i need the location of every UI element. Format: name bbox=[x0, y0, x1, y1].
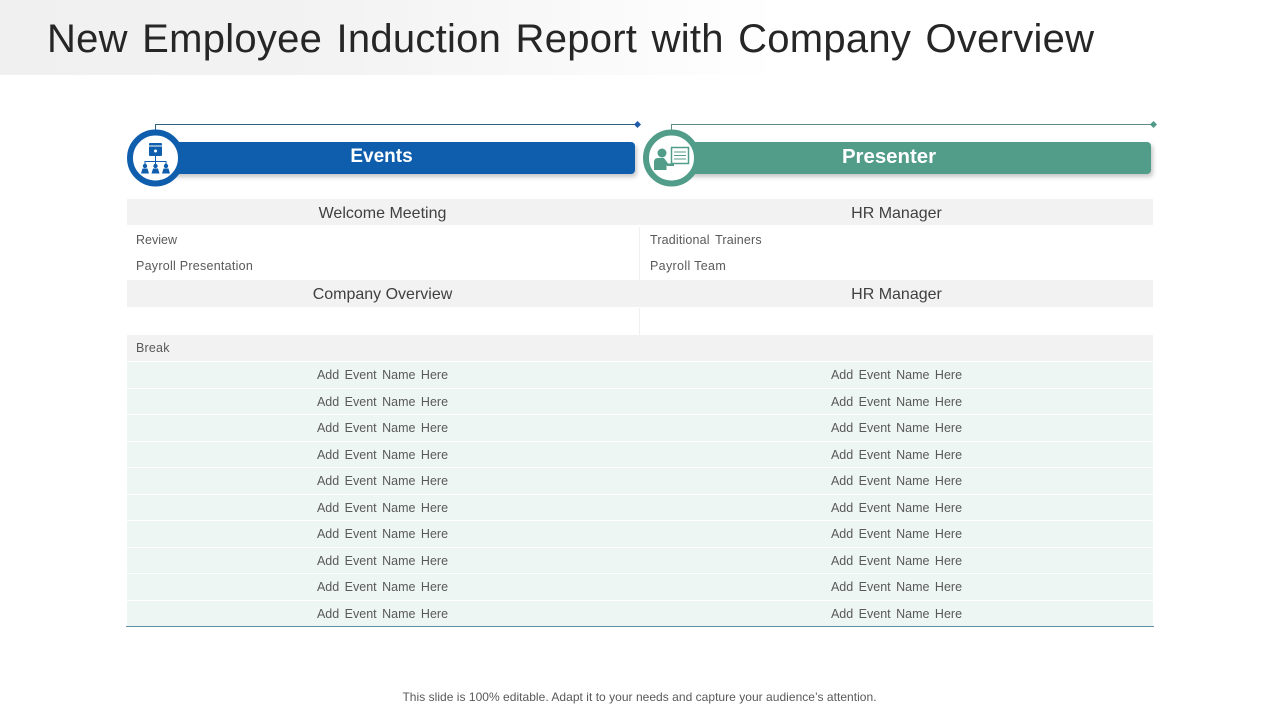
row: break: Break bbox=[136, 341, 170, 355]
row: event 5 bbox=[127, 468, 1153, 494]
row: event 4 bbox=[127, 442, 1153, 467]
title band bbox=[0, 0, 780, 75]
row: event 7: Add Event Name Here bbox=[831, 527, 962, 541]
title: New Employee Induction Report with Company Overview bbox=[47, 17, 1094, 61]
footer note: This slide is 100% editable. Adapt it to your needs and capture your audience’s attention. bbox=[402, 690, 877, 704]
row: event 5: Add Event Name Here bbox=[317, 474, 448, 488]
row: event 9: Add Event Name Here bbox=[317, 580, 448, 594]
row: welcome meeting: Welcome Meeting bbox=[319, 205, 446, 222]
icon: events hierarchy bbox=[127, 130, 180, 186]
row: event 1 bbox=[127, 362, 1153, 388]
row: event 8: Add Event Name Here bbox=[317, 554, 448, 568]
row: event 3: Add Event Name Here bbox=[317, 421, 448, 435]
icon: presenter at board bbox=[643, 130, 695, 186]
row: company overview: HR Manager bbox=[851, 286, 942, 303]
presenter: traditional trainers: Traditional Trainers bbox=[650, 233, 762, 247]
row: event 9 bbox=[127, 574, 1153, 600]
row: company overview bbox=[127, 280, 1153, 307]
row: event 3: Add Event Name Here bbox=[831, 421, 962, 435]
row: event 9: Add Event Name Here bbox=[831, 580, 962, 594]
row: event 10: Add Event Name Here bbox=[831, 606, 962, 620]
row: event 4: Add Event Name Here bbox=[831, 448, 962, 462]
row: event 4: Add Event Name Here bbox=[317, 448, 448, 462]
row: review: Review bbox=[136, 233, 177, 247]
row: event 2: Add Event Name Here bbox=[831, 394, 962, 408]
row: event 6: Add Event Name Here bbox=[317, 500, 448, 514]
row: event 6: Add Event Name Here bbox=[831, 500, 962, 514]
presenter header bar bbox=[686, 142, 1151, 174]
row: event 2 bbox=[127, 388, 1153, 414]
row: event 5: Add Event Name Here bbox=[831, 474, 962, 488]
events connector line bbox=[155, 121, 641, 130]
row: event 2: Add Event Name Here bbox=[317, 394, 448, 408]
row: payroll presentation: Payroll Presentation bbox=[136, 259, 253, 273]
row: welcome meeting: HR Manager bbox=[851, 205, 942, 222]
presenter header bar: Presenter bbox=[842, 146, 936, 168]
row: event 8 bbox=[127, 548, 1153, 573]
row: event 7 bbox=[127, 521, 1153, 546]
column divider bbox=[639, 227, 640, 280]
events header bar: Events bbox=[350, 146, 413, 167]
row: event 3 bbox=[127, 415, 1153, 440]
row: event 8: Add Event Name Here bbox=[831, 554, 962, 568]
row: event 10 bbox=[127, 600, 1153, 626]
row: event 1: Add Event Name Here bbox=[317, 368, 448, 382]
table bottom rule bbox=[126, 626, 1154, 627]
row: event 1: Add Event Name Here bbox=[831, 368, 962, 382]
row: break bbox=[127, 335, 1153, 361]
events header bar bbox=[170, 142, 635, 174]
row: event 10: Add Event Name Here bbox=[317, 606, 448, 620]
row: welcome meeting bbox=[127, 199, 1153, 225]
presenter connector line bbox=[671, 121, 1157, 130]
row: event 6 bbox=[127, 494, 1153, 520]
row: event 7: Add Event Name Here bbox=[317, 527, 448, 541]
row: company overview: Company Overview bbox=[313, 286, 452, 303]
presenter: payroll team: Payroll Team bbox=[650, 259, 726, 273]
